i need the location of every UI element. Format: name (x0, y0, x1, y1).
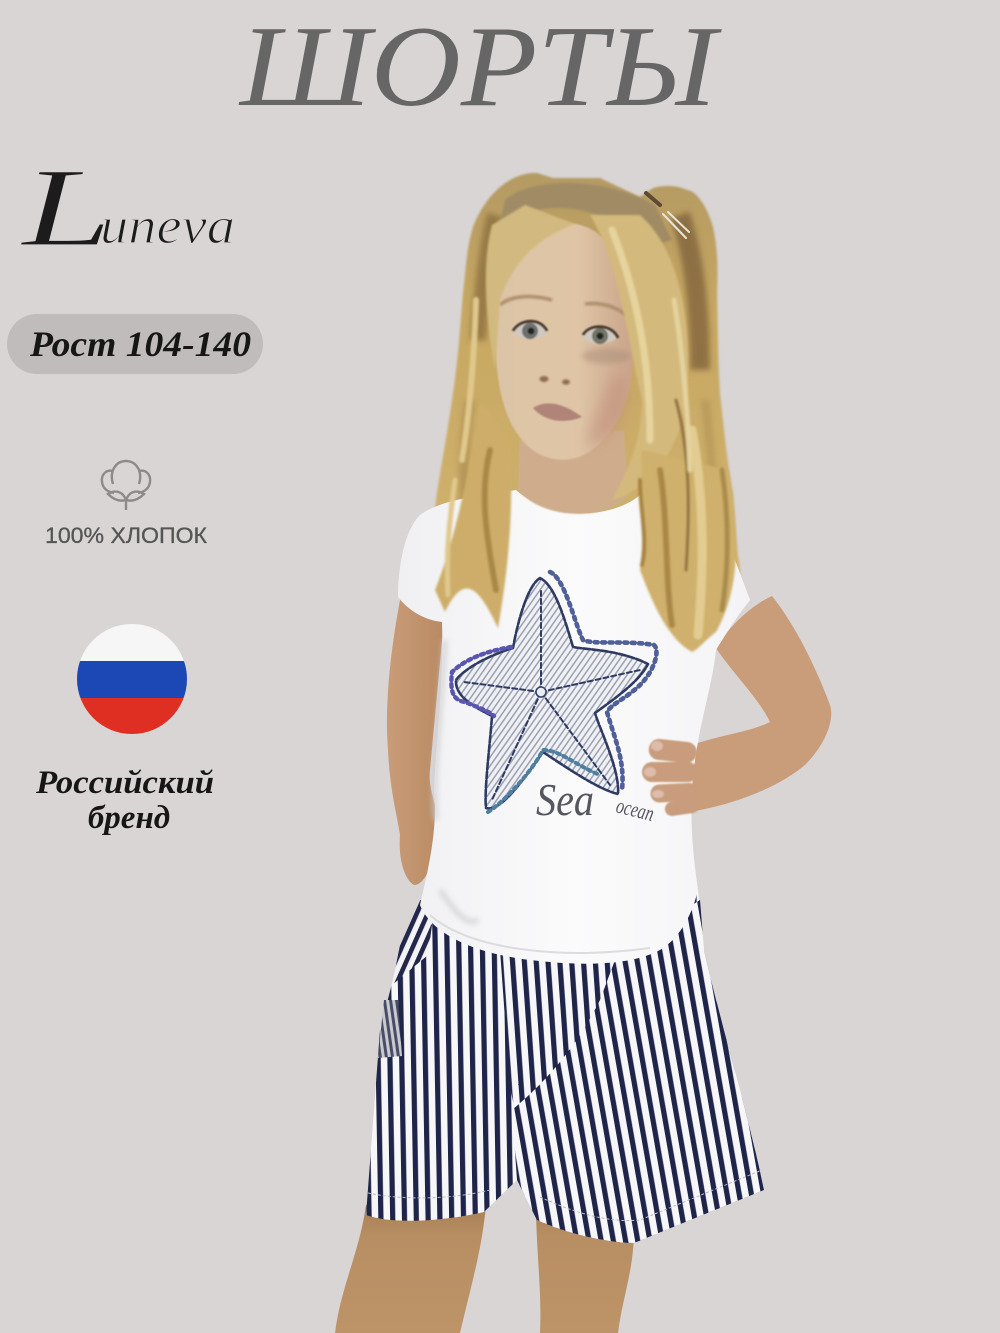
face: left eye (513, 321, 547, 339)
print caption: ocean (614, 793, 657, 826)
icon: cotton (102, 461, 150, 510)
starfish outline (456, 578, 648, 808)
icon: russian flag (77, 624, 187, 735)
hair clip (663, 212, 689, 238)
brand logo: uneva (100, 198, 235, 255)
brand logo (19, 146, 235, 270)
front hair (435, 183, 736, 652)
face: eyebrows (500, 297, 626, 315)
starfish body hatching (456, 578, 648, 808)
photo: girl (335, 173, 831, 1333)
legs (335, 1205, 634, 1333)
face: nose (540, 376, 570, 385)
starfish sequins (550, 572, 656, 790)
brand origin text: бренд (88, 800, 170, 836)
brand origin text (35, 765, 214, 836)
print caption: Sea (536, 774, 594, 825)
size pill (7, 314, 263, 374)
left arm (387, 590, 444, 885)
print caption (536, 774, 657, 826)
face: mouth (533, 403, 582, 421)
fingers (642, 738, 700, 817)
size pill: Рост 104-140 (29, 324, 251, 364)
title: ШОРТЫ (238, 3, 722, 131)
right arm (690, 596, 831, 812)
t-shirt (398, 490, 750, 964)
starfish print (451, 572, 657, 826)
brand logo: L (19, 146, 112, 270)
hair strands over shirt (435, 230, 736, 652)
face: right eye (583, 327, 618, 344)
back hair and ponytails (430, 173, 740, 652)
brand origin text: Российский (35, 765, 214, 801)
cotton label: 100% ХЛОПОК (45, 523, 207, 548)
face (495, 223, 672, 460)
striped shorts (366, 890, 764, 1243)
neck (518, 430, 628, 514)
